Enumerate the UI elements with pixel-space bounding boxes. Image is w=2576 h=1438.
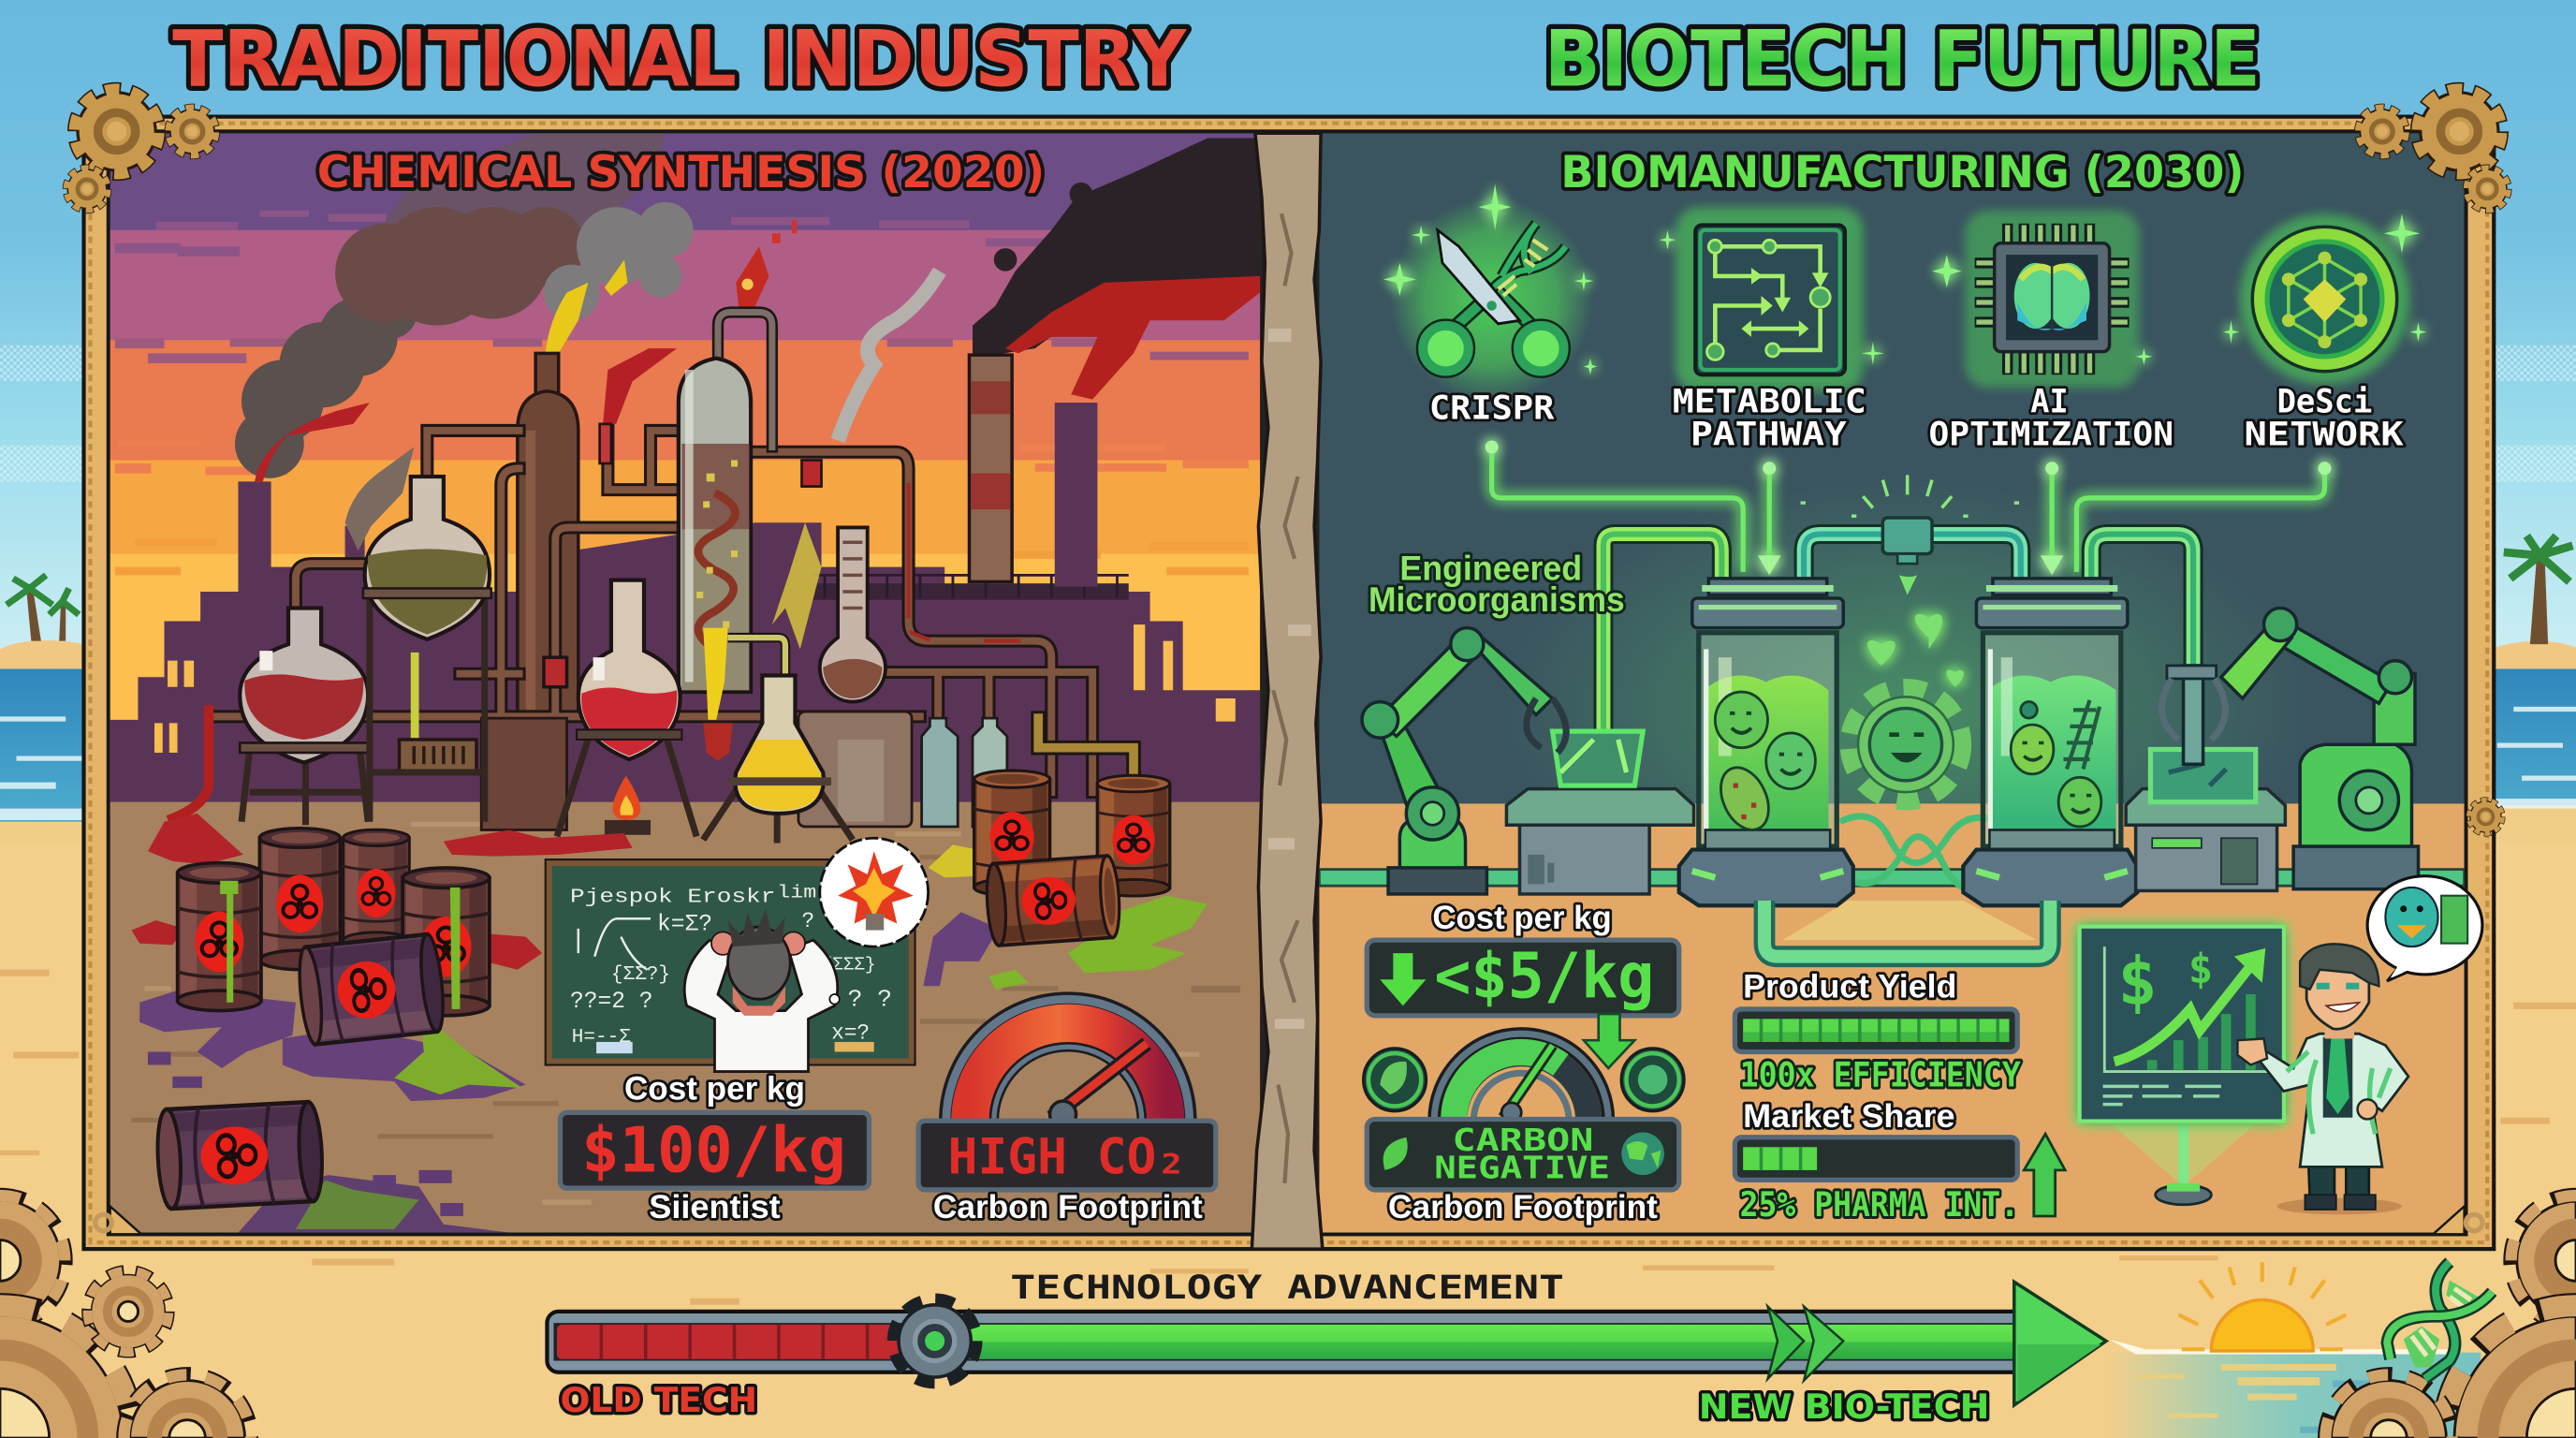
label: engineered microorganisms: Microorganisms (1368, 580, 1625, 619)
barrel (344, 829, 409, 948)
icon: leaf badge (1364, 1049, 1426, 1111)
chalkboard: ? (801, 909, 814, 933)
tipped barrel (296, 933, 446, 1046)
speech bubble (2367, 876, 2482, 981)
smiling gear microbe (1852, 690, 1960, 799)
gear marker on timeline (899, 1305, 971, 1377)
hologram chart (2080, 927, 2284, 1205)
tipped barrel right (985, 855, 1121, 946)
small graduated flask (820, 527, 886, 702)
stressed scientist (684, 909, 838, 1072)
sunset sky (110, 133, 1260, 816)
chalkboard: x=? (831, 1020, 870, 1045)
frame corner braces (95, 1206, 2482, 1234)
left bioreactor tank (1679, 579, 1853, 905)
barrel right (1097, 775, 1170, 896)
smoke plumes (235, 133, 1260, 550)
chalkboard: H=--Σ (572, 1026, 631, 1049)
caption: carbon footprint right: Carbon Footprint (1388, 1189, 1658, 1225)
stat: 100x efficiency: 100x EFFICIENCY (1740, 1054, 2021, 1094)
island and palm right (2494, 536, 2576, 668)
U pipe below tanks (1764, 901, 2050, 957)
caption: carbon footprint left: Carbon Footprint (933, 1189, 1203, 1225)
barrel (259, 829, 340, 970)
carbon value box: HIGH CO2 (918, 1121, 1216, 1190)
large corner gear (0, 1306, 132, 1438)
large corner gear (2444, 1306, 2576, 1438)
brown distillation column (518, 353, 578, 718)
barrel with green slime (402, 868, 490, 1016)
gears bottom right (2325, 1196, 2576, 1438)
label: engineered microorganisms: Engineered (1399, 550, 1582, 588)
panel: traditional industry scene (110, 133, 1260, 1233)
hazard barrels group (155, 770, 1170, 1210)
label: metabolic pathway: PATHWAY (1690, 416, 1847, 454)
caption: Siientist: Siientist (649, 1189, 781, 1225)
label: DeSci network: DeSci (2277, 383, 2372, 421)
carbon gauge: high (946, 999, 1190, 1127)
corner gears top right (2359, 90, 2508, 210)
icon glows (1390, 198, 2410, 401)
label: market share: Market Share (1743, 1098, 1955, 1135)
chalkboard: ? ? (848, 985, 892, 1013)
cost label right: Cost per kg (1432, 900, 1612, 936)
hologram chart: $ (2188, 946, 2213, 993)
label: AI optimization: AI (2030, 383, 2069, 421)
arrow up (2024, 1134, 2065, 1216)
chalkboard: {ΣΣ?} (611, 963, 670, 986)
gears bottom left (0, 1196, 251, 1438)
arrow down to gauge (1584, 1014, 1634, 1068)
icon: AI chip with brain (1975, 224, 2130, 374)
chalkboard: lim (777, 882, 816, 902)
DNA strand between tanks (1840, 816, 1988, 889)
round olive flask on stand (363, 477, 491, 822)
icon: sun with rays (2178, 1262, 2346, 1351)
left robot arm (1362, 628, 1566, 894)
label: old tech: OLD TECH (560, 1380, 757, 1420)
cost value box: $100/kg: $100/kg (581, 1114, 846, 1187)
happy scientist presenting (2237, 944, 2408, 1214)
panel: biotech future scene (1319, 133, 2465, 1233)
middle-left half gear (0, 1196, 65, 1326)
chalkboard: ??=2 ? (570, 990, 652, 1015)
label: product yield: Product Yield (1743, 969, 1956, 1005)
middle-right half gear (2511, 1196, 2576, 1326)
small free gear (87, 1270, 168, 1352)
right table with vessel (2126, 666, 2285, 890)
chalkboard: Pjespok Eroskr (570, 887, 775, 909)
icon: DNA helix (2387, 1262, 2492, 1379)
thought bubble with explosion (820, 838, 929, 1005)
progress bar: market share (1734, 1137, 2017, 1180)
right robot arm (2221, 609, 2419, 889)
barrel right (974, 770, 1050, 896)
bottom half gear (124, 1374, 251, 1438)
label: DeSci network (2244, 383, 2404, 454)
chalkboard: k=Σ? (657, 913, 712, 938)
green pipes between tanks (1603, 535, 2193, 879)
icon: DeSci network coin (2252, 227, 2397, 372)
icon: metabolic pathway board (1695, 225, 1845, 374)
chemical spills (131, 814, 1208, 1233)
panel frame (84, 117, 2494, 1249)
label: metabolic pathway (1673, 383, 1866, 454)
heading: technology advancement: TECHNOLOGY ADVANCEMENT (1010, 1269, 1564, 1307)
carbon gauge: negative (1434, 1034, 1608, 1123)
bottom sand strip: sea and sunset (2106, 1340, 2481, 1438)
icon: CRISPR scissors and DNA (1417, 224, 1570, 377)
chalkboard (546, 859, 915, 1065)
carbon value box: carbon negative: NEGATIVE (1434, 1150, 1610, 1186)
cost value box: <$5/kg (1367, 940, 1679, 1016)
pipe joint with sparks (1801, 475, 2019, 594)
hearts (1867, 614, 1964, 687)
left tank microbes (1711, 692, 1815, 838)
label: DeSci network: NETWORK (2244, 416, 2404, 454)
hologram chart: $ (2117, 944, 2158, 1020)
title: biotech future: BIOTECH FUTURE (1544, 14, 2261, 104)
ground (110, 802, 1260, 1233)
label: AI optimization: OPTIMIZATION (1928, 416, 2174, 454)
stat: 25% pharma int.: 25% PHARMA INT. (1740, 1184, 2019, 1225)
label: metabolic pathway: METABOLIC (1673, 383, 1866, 421)
right bioreactor tank (1963, 579, 2137, 905)
icon: burner flame (605, 776, 651, 835)
label: new bio-tech: NEW BIO-TECH (1699, 1387, 1989, 1427)
slate background and ground (1319, 133, 2465, 1233)
label: engineered microorganisms (1368, 550, 1625, 619)
glowing feed lines with arrows (1486, 440, 2331, 575)
factory silhouette (110, 481, 1260, 816)
cost value box: <$5/kg: <$5/kg (1434, 940, 1654, 1013)
cost label left: Cost per kg (624, 1070, 805, 1107)
tipped barrel lower left (155, 1101, 324, 1210)
pipework (172, 313, 1134, 818)
corner gears top left (66, 90, 215, 210)
carbon value box: carbon negative (1367, 1119, 1679, 1190)
label: CRISPR: CRISPR (1429, 389, 1555, 428)
right tank microbes and DNA (2011, 700, 2101, 827)
icon: globe badge (1621, 1049, 1684, 1111)
title: traditional industry: TRADITIONAL INDUSTRY (172, 14, 1187, 104)
small gear on right frame (2469, 800, 2502, 833)
carbon value box: carbon negative: CARBON (1453, 1122, 1593, 1158)
striped chimney and purple chimneys (970, 355, 1097, 587)
island and palms left (0, 575, 85, 668)
barrel with green slime (178, 863, 261, 1011)
sparkles (1383, 184, 2426, 374)
yellow erlenmeyer flask (703, 675, 853, 844)
label: AI optimization (1928, 383, 2174, 454)
stone divider wall (1251, 133, 1323, 1249)
progress bar: product yield (1734, 1009, 2017, 1051)
chalkboard: {ΣΣΣ} (822, 955, 875, 976)
left table with vessel (1506, 731, 1694, 894)
red flask over burner (557, 580, 696, 837)
round red flask on stand (240, 609, 368, 825)
bottom half gear (2325, 1374, 2452, 1438)
machinery block and bottles (399, 712, 1007, 829)
heading: chemical synthesis: CHEMICAL SYNTHESIS (2020) (317, 147, 1045, 198)
progress arrow: old tech to new bio-tech (547, 1282, 2106, 1405)
tall glass column with coil (679, 359, 822, 761)
heading: biomanufacturing: BIOMANUFACTURING (2030) (1560, 147, 2244, 198)
carbon value box: HIGH CO2: HIGH CO₂ (948, 1128, 1186, 1185)
floor pipe (1319, 870, 2465, 886)
